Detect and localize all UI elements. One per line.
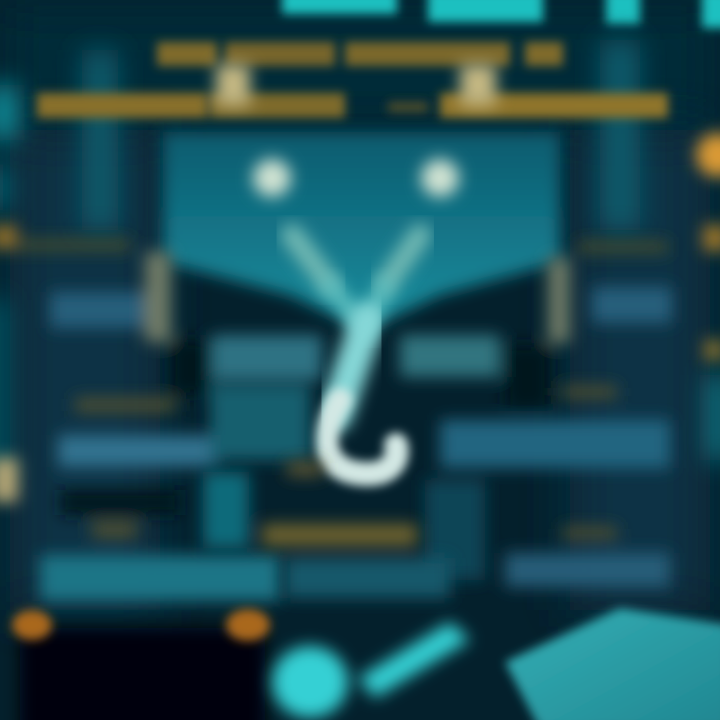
side columns xyxy=(0,40,720,480)
left content blocks xyxy=(0,225,322,601)
bottom right teal panel xyxy=(505,608,720,720)
title: second line gold bar xyxy=(37,93,668,118)
title: first line gold bar xyxy=(157,42,563,66)
bottom cyan shapes xyxy=(272,622,470,718)
central teal panel xyxy=(163,132,560,330)
panel dots xyxy=(253,159,459,197)
centre lower blocks xyxy=(203,462,450,598)
orange feet xyxy=(12,609,270,641)
converging lines and hook xyxy=(292,235,420,474)
top cyan bars xyxy=(282,0,720,28)
orange accent at right edge xyxy=(696,133,720,177)
right content blocks xyxy=(400,225,720,587)
bottom left black block xyxy=(20,628,265,720)
title icons xyxy=(216,64,496,106)
